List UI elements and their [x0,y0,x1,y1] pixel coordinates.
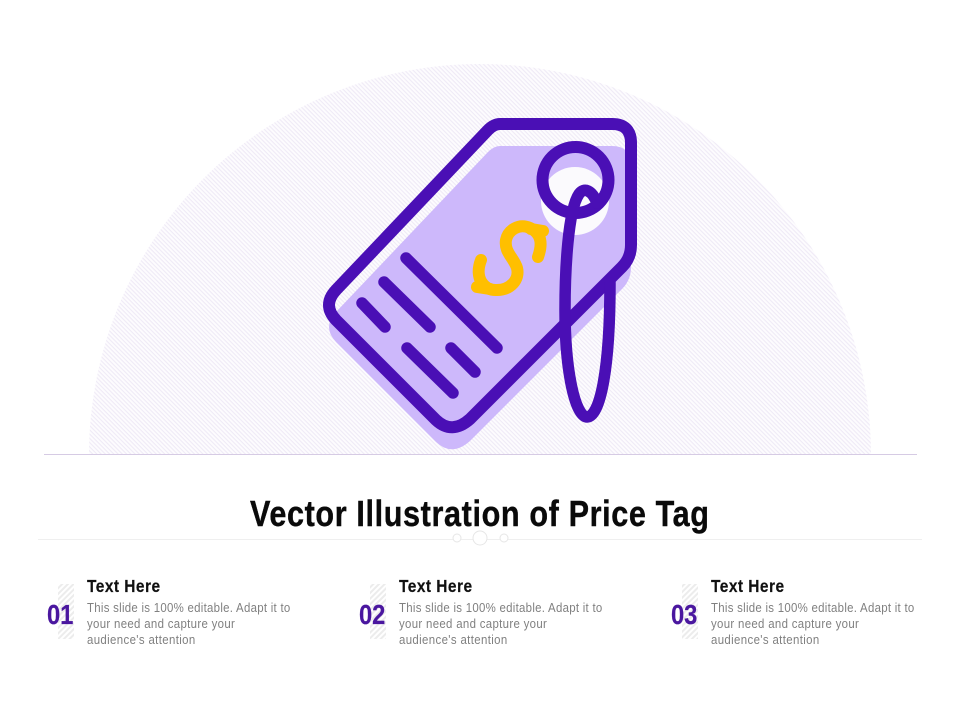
number 02: 02 [359,598,385,630]
description 01: audience's attention [87,632,195,647]
description 01: This slide is 100% editable. Adapt it to [87,600,290,615]
background semicircle [89,64,871,455]
number 01: 01 [47,598,73,630]
item 02 [359,576,602,647]
description 03 [711,600,914,647]
description 01: your need and capture your [87,616,235,631]
description 02: audience's attention [399,632,507,647]
tag hole highlight [541,167,609,235]
hatch accent 02 [370,584,386,639]
baseline rule [44,454,917,456]
item 03 [671,576,914,647]
hatch accent 03 [682,584,698,639]
hatch accent 01 [58,584,74,639]
heading 02: Text Here [399,576,472,596]
description 01 [87,600,290,647]
description 02 [399,600,602,647]
heading 01: Text Here [87,576,160,596]
description 03: audience's attention [711,632,819,647]
icon: dollar sign [477,226,543,290]
tag outline [329,124,631,427]
item 01 [47,576,290,647]
description 02: your need and capture your [399,616,547,631]
number 03: 03 [671,598,697,630]
tag shadow fill [329,146,631,449]
description 02: This slide is 100% editable. Adapt it to [399,600,602,615]
title: Vector Illustration of Price Tag [250,495,709,535]
description 03: your need and capture your [711,616,859,631]
description 03: This slide is 100% editable. Adapt it to [711,600,914,615]
string loop [565,190,610,417]
heading 03: Text Here [711,576,784,596]
icon: price tag [329,124,631,449]
divider with circles [38,531,922,545]
text lines on tag [362,258,497,393]
tag ring [542,147,608,213]
